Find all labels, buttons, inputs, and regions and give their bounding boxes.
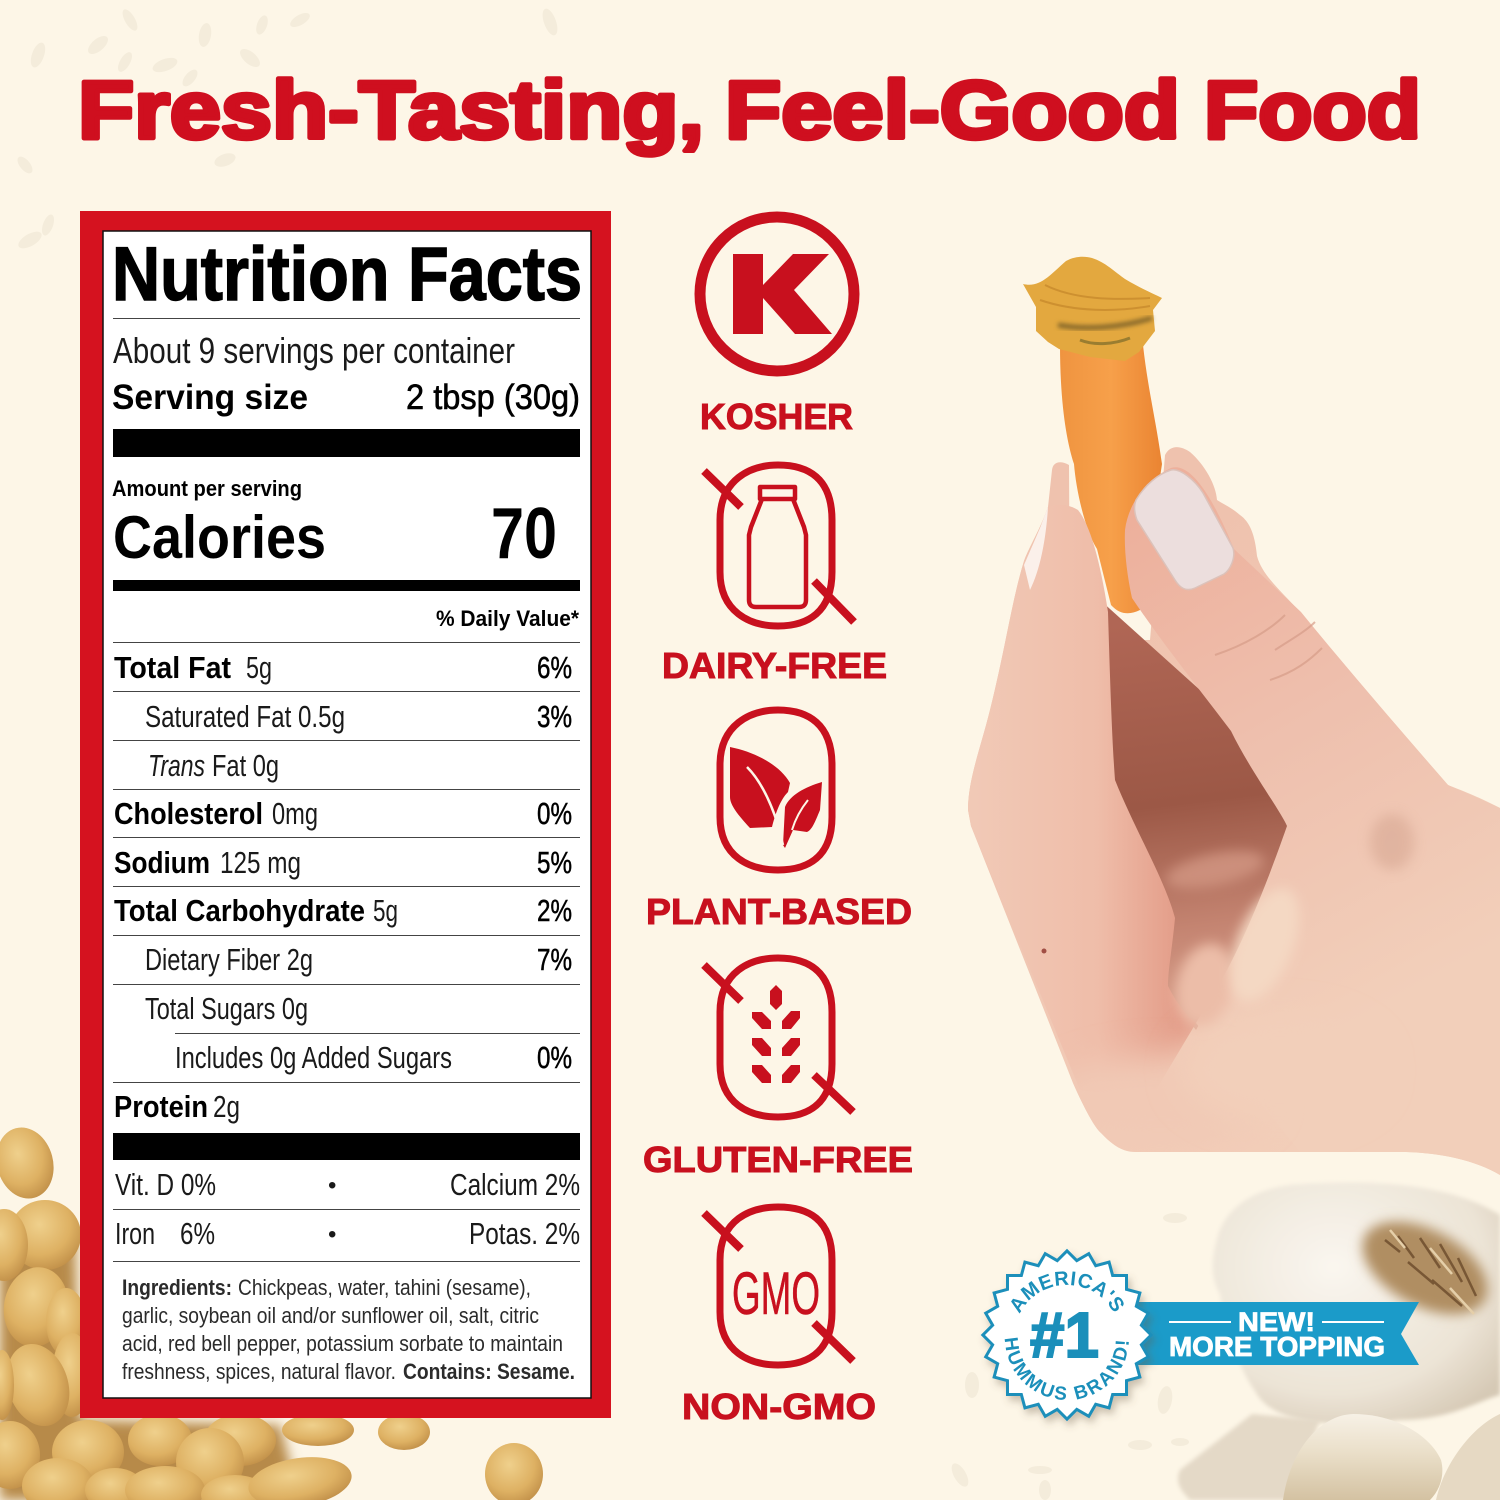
title: Fresh-Tasting, <box>78 65 704 156</box>
vitamins: Potas. 2% <box>469 1216 580 1251</box>
ingredients: Ingredients: <box>122 1275 232 1300</box>
nutrient rows: Protein <box>114 1089 208 1124</box>
icon: non-gmo: GMO <box>732 1260 820 1327</box>
calories: Calories <box>113 504 326 571</box>
inner finger fold <box>1163 844 1267 896</box>
label: gluten-free: GLUTEN-FREE <box>643 1139 913 1180</box>
title <box>78 65 1421 156</box>
divider rules <box>113 318 580 1262</box>
nutrient rows: Total Sugars 0g <box>145 991 308 1026</box>
calories: % Daily Value* <box>436 606 579 631</box>
banner: new more topping: NEW! <box>1238 1307 1315 1337</box>
icon: non-gmo <box>704 1207 853 1365</box>
nutrient rows: 5% <box>537 845 572 880</box>
nutrient rows: Total Fat <box>114 650 231 685</box>
label: dairy-free: DAIRY-FREE <box>662 645 887 686</box>
vitamins: Calcium 2% <box>450 1167 580 1202</box>
nutrient rows: 5g <box>373 893 398 928</box>
icon: gluten-free <box>704 958 853 1117</box>
hand base silhouette <box>968 447 1500 1175</box>
nutrient rows: 0mg <box>272 796 318 831</box>
nutrient rows: 0% <box>537 1040 572 1075</box>
nutrient rows: 2g <box>213 1089 240 1124</box>
hand holding carrot <box>968 257 1500 1175</box>
vitamins: Iron <box>115 1216 155 1251</box>
nutrient rows: Sodium <box>114 845 210 880</box>
calories <box>112 476 579 631</box>
vitamins: Vit. D 0% <box>115 1167 216 1202</box>
label: plant-based: PLANT-BASED <box>646 891 912 932</box>
ingredients: garlic, soybean oil and/or sunflower oil, salt, citric <box>122 1303 539 1328</box>
servings: Serving size <box>112 378 308 417</box>
sesame seeds <box>15 7 1189 1500</box>
nutrient rows: Saturated Fat 0.5g <box>145 699 345 734</box>
calories: Amount per serving <box>112 476 302 501</box>
vitamins: 6% <box>180 1216 215 1251</box>
fingernail <box>1135 470 1234 590</box>
vitamins: • <box>328 1221 336 1248</box>
garlic bulb <box>1213 1182 1500 1424</box>
ingredients <box>122 1275 575 1384</box>
calories: 70 <box>491 494 557 574</box>
nutrient rows: 125 mg <box>220 845 301 880</box>
garlic roots <box>1347 1203 1500 1333</box>
nutrient rows: Trans <box>148 748 205 783</box>
nutrient rows: Cholesterol <box>114 796 263 831</box>
thumb creases <box>1215 615 1322 680</box>
chickpeas <box>0 1121 543 1500</box>
ingredients: Chickpeas, water, tahini (sesame), <box>238 1275 531 1300</box>
banner: new more topping <box>1135 1302 1419 1365</box>
badge: america's #1 hummus brand <box>980 1248 1157 1428</box>
nutrient rows: 7% <box>537 942 572 977</box>
garlic stem clove <box>1178 1414 1320 1500</box>
icon: dairy-free <box>704 465 854 626</box>
servings <box>112 330 580 417</box>
nutrient rows: Fat 0g <box>212 748 279 783</box>
thumb <box>1125 467 1500 1175</box>
nutrient rows: 5g <box>246 650 272 685</box>
garlic cloves <box>1283 1414 1442 1500</box>
ingredients: Contains: Sesame. <box>403 1359 575 1384</box>
mole <box>1042 948 1046 954</box>
label: non-gmo: NON-GMO <box>682 1386 876 1427</box>
badge star <box>981 1249 1153 1421</box>
title: Feel-Good <box>725 65 1180 156</box>
badge: america's #1 hummus brand: #1 <box>1030 1299 1099 1371</box>
icon: plant-based <box>720 710 832 870</box>
badge: america's #1 hummus brand: AMERICA'S <box>1011 1271 1124 1314</box>
vitamins: • <box>328 1172 336 1199</box>
nutrient rows: Total Carbohydrate <box>114 893 365 928</box>
banner: new more topping: MORE TOPPING <box>1169 1331 1385 1362</box>
index finger <box>968 505 1196 1100</box>
nutrient rows <box>114 650 572 1124</box>
ingredients: acid, red bell pepper, potassium sorbate to maintain <box>122 1331 563 1356</box>
finger sliver <box>1024 507 1048 590</box>
ingredients: freshness, spices, natural flavor. <box>122 1359 396 1384</box>
title: Food <box>1204 65 1421 156</box>
label: kosher: KOSHER <box>700 396 853 437</box>
nutrient rows: Dietary Fiber 2g <box>145 942 313 977</box>
thick bars <box>113 429 580 1160</box>
badge: america's #1 hummus brand: HUMMUS BRAND! <box>1004 1338 1129 1400</box>
icon: kosher <box>700 217 854 371</box>
nutrient rows: 3% <box>537 699 572 734</box>
nutrition heading: Nutrition Facts <box>112 232 582 317</box>
servings: About 9 servings per container <box>113 330 515 371</box>
nutrient rows: 6% <box>537 650 572 685</box>
hummus topping <box>1023 257 1162 361</box>
garlic <box>1178 1182 1500 1500</box>
blended wrist shading <box>1074 814 1416 1128</box>
vitamins <box>115 1167 580 1251</box>
servings: 2 tbsp (30g) <box>406 378 580 417</box>
nutrient rows: Includes 0g Added Sugars <box>175 1040 452 1075</box>
nutrient rows: 2% <box>537 893 572 928</box>
carrot <box>1060 345 1162 613</box>
nutrient rows: 0% <box>537 796 572 831</box>
shadow between fingers <box>1100 600 1300 1030</box>
panel: nutrition facts <box>80 211 611 1418</box>
